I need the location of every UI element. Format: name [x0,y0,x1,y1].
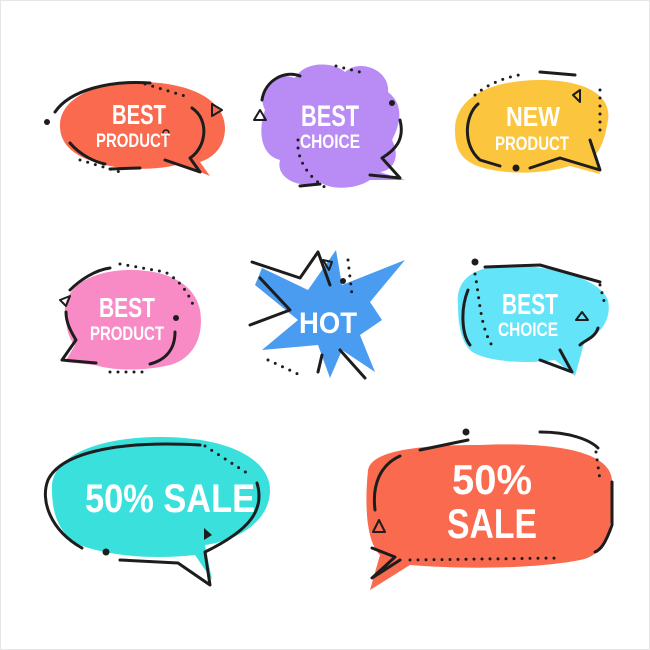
bubble: best choice cyan [458,258,609,376]
bubble: 50% sale teal [45,437,270,585]
bubble: best product red: BEST [112,99,166,130]
bubble: best product pink: BEST [99,292,155,323]
bubble: 50% sale red [366,428,612,590]
bubble: best product red [44,82,225,176]
bubble: best product pink [60,264,201,372]
bubble: best choice purple cloud: CHOICE [300,132,360,153]
bubble: 50% sale red: 50% [452,456,532,503]
bubble: new product yellow: PRODUCT [495,134,569,155]
bubble: best product red: PRODUCT [96,131,170,152]
bubble: best product pink: PRODUCT [90,324,164,345]
bubble: best choice purple cloud [254,64,405,190]
starburst: hot blue: HOT [299,307,357,340]
bubble: new product yellow: NEW [506,101,560,132]
bubble: new product yellow [455,72,608,174]
bubble: best choice cyan: CHOICE [498,320,558,341]
bubble: 50% sale teal: 50% SALE [85,477,255,521]
bubble: best choice cyan: BEST [502,289,558,321]
bubble: best choice purple cloud: BEST [301,100,359,133]
starburst: hot blue [250,250,405,378]
bubble: 50% sale red: SALE [447,500,537,547]
